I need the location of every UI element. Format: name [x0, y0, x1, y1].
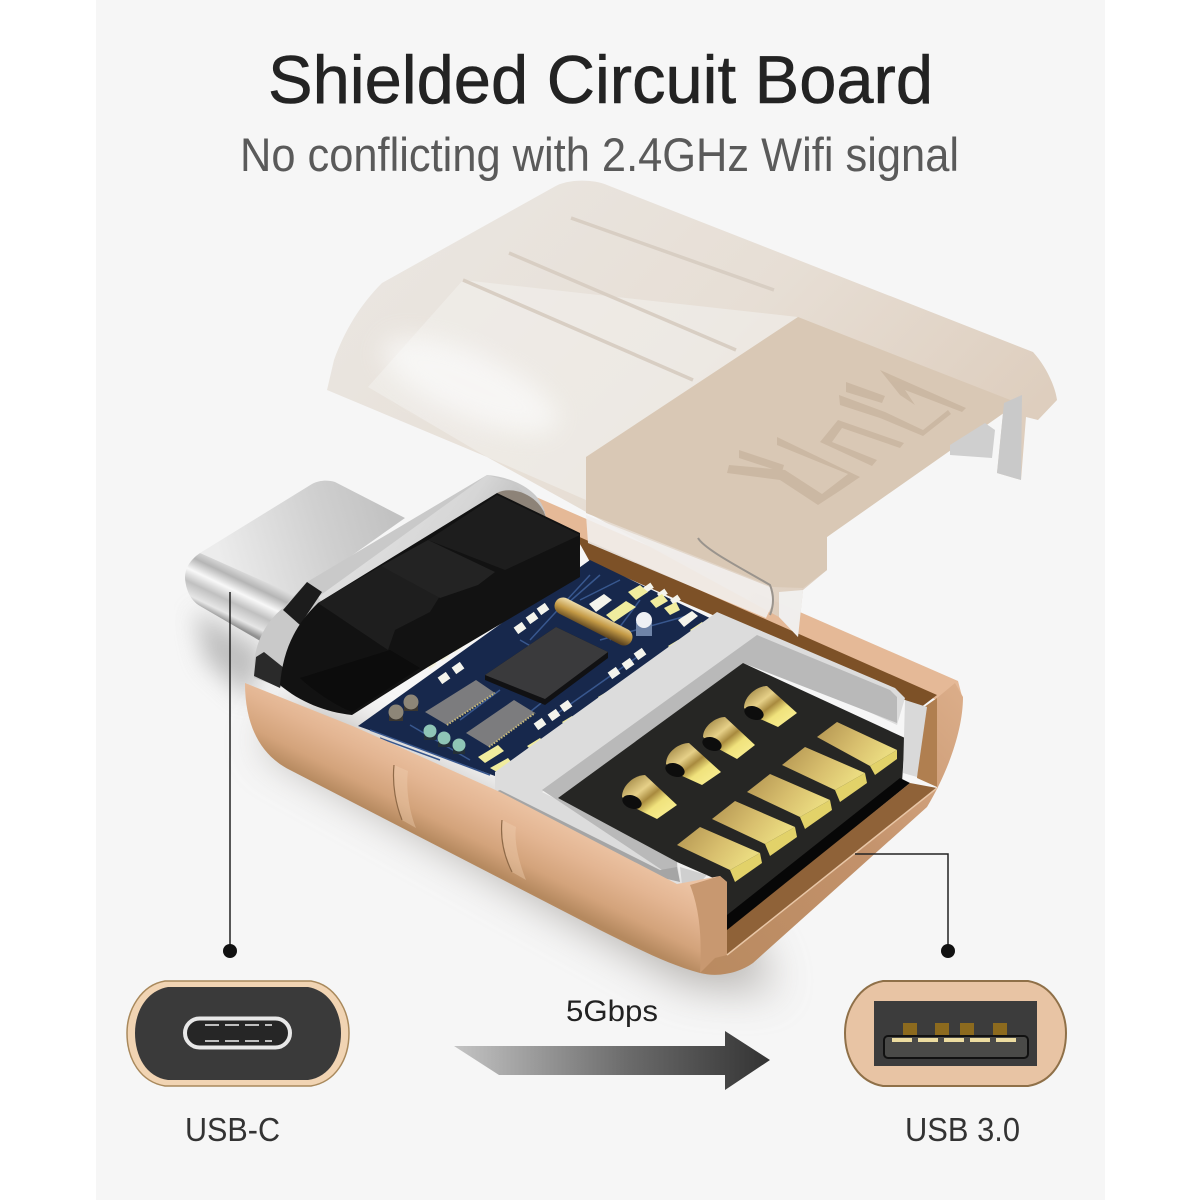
silver shield ring	[254, 475, 546, 690]
USB 3.0 port icon	[845, 981, 1066, 1086]
adapter gold shell front wall	[245, 683, 727, 973]
capacitors	[388, 694, 418, 721]
adapter gold shell back rim	[520, 490, 963, 708]
translucent top cover	[327, 181, 1057, 637]
title: Shielded Circuit Board	[268, 42, 933, 118]
adapter gold shell end cap	[700, 683, 963, 975]
cover soft white glare	[370, 317, 570, 453]
USB 3.0 leader line	[855, 854, 955, 958]
cover beige flat area	[586, 317, 1023, 588]
subtitle: No conflicting with 2.4GHz Wifi signal	[240, 128, 959, 181]
USB-C metal plug	[185, 481, 405, 642]
data flow arrow	[454, 1031, 770, 1090]
cover right metal tab	[950, 395, 1022, 480]
lower gold contacts	[677, 722, 897, 882]
USB 3.0 label: USB 3.0	[905, 1111, 1020, 1148]
cover logo marks	[727, 370, 966, 505]
main chip	[485, 627, 608, 705]
cover lighter highlight patch	[368, 280, 798, 500]
upper gold contacts	[620, 686, 797, 819]
USB 3.0 black tongue	[558, 663, 910, 932]
USB-C label: USB-C	[185, 1111, 280, 1148]
cover clip slit	[698, 538, 773, 615]
speed label: 5Gbps	[566, 995, 658, 1028]
USB 3.0 silver tray	[495, 612, 905, 882]
black shield block	[280, 493, 580, 715]
yellow SMD pads	[478, 585, 706, 772]
solder beads	[428, 603, 525, 667]
crystal	[563, 606, 652, 637]
SMD components	[438, 583, 698, 730]
teal capacitors	[424, 724, 466, 754]
cover right clip	[779, 590, 803, 637]
small chips	[425, 680, 535, 747]
cover grooves	[463, 218, 774, 380]
circuit board	[358, 560, 718, 776]
cover lower lip	[586, 515, 773, 618]
USB-C port icon	[127, 981, 349, 1086]
USB-C leader line	[223, 592, 237, 958]
drop shadow under adapter	[195, 610, 775, 990]
